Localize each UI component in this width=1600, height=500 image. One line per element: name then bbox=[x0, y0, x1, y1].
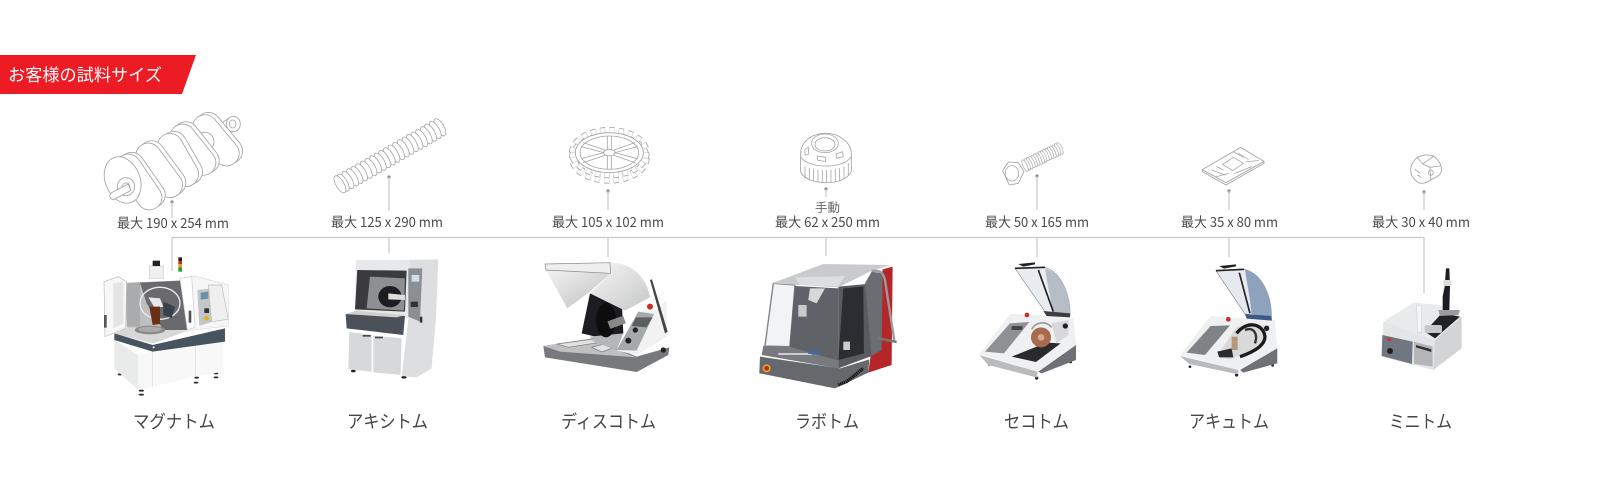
size label: 最大 30 x 40 mm bbox=[1372, 211, 1470, 231]
machine: ミニトム bbox=[1382, 268, 1462, 370]
title banner: お客様の試料サイズ bbox=[8, 61, 162, 86]
product name: セコトム bbox=[1004, 408, 1069, 434]
size label: 最大 190 x 254 mm bbox=[117, 212, 229, 232]
product name: ラボトム bbox=[795, 408, 859, 434]
connector: crankshaft to machine bbox=[170, 200, 174, 271]
product name: アキュトム bbox=[1189, 408, 1269, 434]
manual label: 手動 bbox=[815, 197, 840, 216]
column: セコトム bbox=[979, 142, 1089, 434]
machine: ディスコトム bbox=[543, 263, 669, 372]
size label: 最大 105 x 102 mm bbox=[552, 211, 664, 231]
column: マグナトム bbox=[98, 115, 240, 434]
product name: マグナトム bbox=[133, 408, 215, 434]
connector: circuit board to machine bbox=[1227, 189, 1231, 257]
size label: 最大 35 x 80 mm bbox=[1181, 211, 1278, 231]
connector: rod to machine bbox=[387, 175, 391, 253]
icon: hex bolt bbox=[1003, 142, 1064, 185]
size label: 最大 62 x 250 mm bbox=[775, 211, 880, 231]
column: ディスコトム bbox=[543, 131, 669, 434]
machine: セコトム bbox=[979, 262, 1076, 380]
product name: アキシトム bbox=[347, 408, 428, 434]
column: アキュトム bbox=[1180, 147, 1278, 434]
title banner bbox=[0, 55, 196, 94]
column: アキシトム bbox=[331, 117, 448, 434]
connector: knob to machine bbox=[824, 187, 828, 256]
icon: threaded rod bbox=[332, 117, 448, 195]
product name: ミニトム bbox=[1389, 408, 1452, 434]
connector: rock to machine bbox=[1422, 190, 1426, 293]
connector: gear to machine bbox=[606, 189, 610, 257]
icon: knurled knob bbox=[801, 133, 851, 183]
connector: bolt to machine bbox=[1035, 174, 1039, 257]
column: ラボトム bbox=[759, 133, 897, 434]
machine: アキュトム bbox=[1180, 264, 1277, 377]
product name: ディスコトム bbox=[561, 408, 656, 434]
icon: circuit board bbox=[1202, 147, 1264, 185]
connector: horizontal line bbox=[172, 236, 1424, 238]
machine: アキシトム bbox=[346, 259, 438, 379]
column: ミニトム bbox=[1372, 155, 1470, 434]
icon: rock bbox=[1411, 155, 1442, 183]
icon: gear bbox=[573, 131, 645, 179]
icon: crankshaft bbox=[98, 115, 240, 209]
machine: ラボトム bbox=[759, 264, 897, 388]
size label: 最大 125 x 290 mm bbox=[331, 211, 443, 231]
size label: 最大 50 x 165 mm bbox=[985, 211, 1089, 231]
machine: マグナトム bbox=[104, 257, 228, 396]
